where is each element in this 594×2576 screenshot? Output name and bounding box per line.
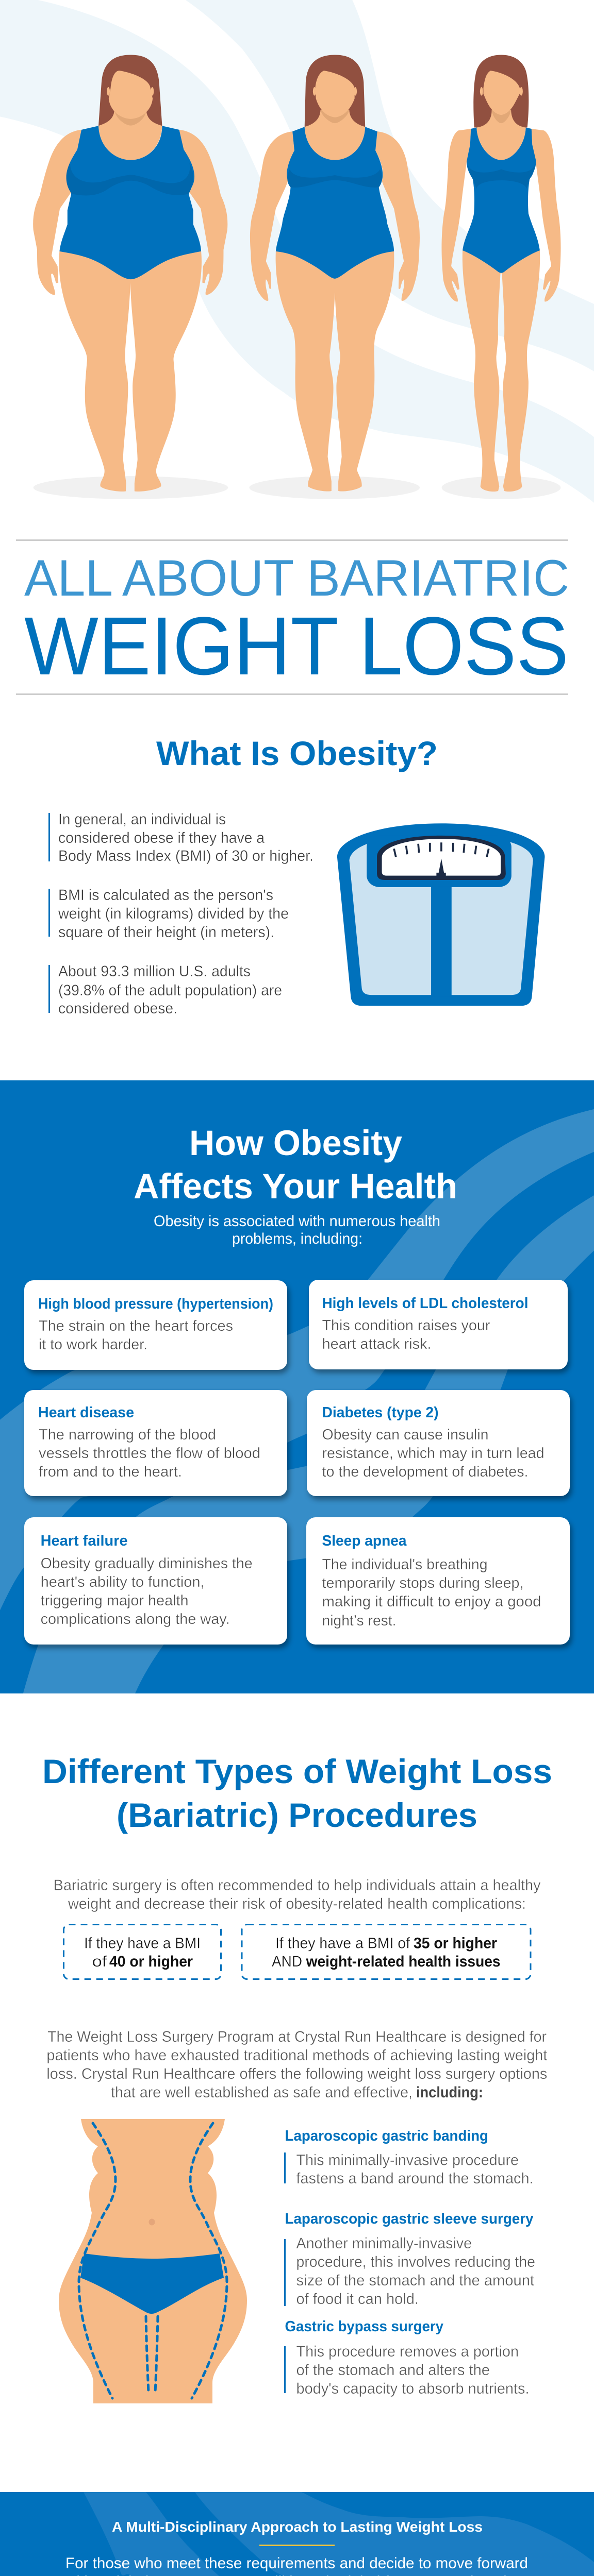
card: LDL cholesterol <box>309 1280 568 1369</box>
callout: BMI 40: of <box>92 1953 107 1970</box>
panel: multi-disciplinary approach <box>0 2492 594 2576</box>
panel: how obesity affects your health <box>0 1080 594 1695</box>
card: diabetes: Obesity can cause insulin <box>322 1427 489 1443</box>
card: sleep apnea: Sleep apnea <box>322 1533 407 1549</box>
text block: weight loss surgery program: including: <box>416 2084 483 2101</box>
procedure: gastric bypass: body's capacity to absorb nutrients. <box>296 2380 529 2397</box>
callout: BMI 40: If they have a BMI <box>84 1935 201 1952</box>
text block: obesity facts <box>48 811 314 1017</box>
text block: obesity facts: About 93.3 million U.S. adults <box>58 963 251 980</box>
procedure: gastric sleeve: Laparoscopic gastric sleeve surgery <box>285 2211 533 2227</box>
card: heart disease: Heart disease <box>38 1404 134 1421</box>
subtitle: problems, including: <box>232 1230 362 1247</box>
text block: obesity facts: (39.8% of the adult population) are <box>58 982 282 999</box>
text block: obesity facts: In general, an individual is <box>58 811 226 828</box>
figure: medium <box>249 55 420 499</box>
card: heart disease: vessels throttles the flow of blood <box>39 1445 260 1462</box>
callout: BMI 40 <box>64 1925 221 1979</box>
card: diabetes <box>307 1390 570 1496</box>
heading: how obesity: Affects Your Health <box>134 1166 457 1206</box>
card: heart failure: Obesity gradually diminishes the <box>41 1555 253 1572</box>
heading: how obesity <box>134 1123 457 1206</box>
text block: surgery intro <box>54 1877 541 1912</box>
card: high blood pressure: The strain on the heart forces <box>39 1318 233 1334</box>
procedure: gastric sleeve: size of the stomach and the amount <box>296 2272 535 2289</box>
procedure: gastric banding: This minimally-invasive procedure <box>296 2151 519 2169</box>
heading: types of procedures: (Bariatric) Procedures <box>117 1796 477 1834</box>
card: heart disease: The narrowing of the blood <box>39 1427 216 1443</box>
text block: surgery intro: Bariatric surgery is often recommended to help individuals attain a healthy <box>54 1877 541 1894</box>
text block: weight loss surgery program: The Weight Loss Surgery Program at Crystal Run Healthcare is designed for <box>47 2028 547 2045</box>
card: heart disease: from and to the heart. <box>39 1464 182 1480</box>
text block: obesity facts: Body Mass Index (BMI) of 30 or higher. <box>58 848 314 865</box>
illustration: torso with incision lines <box>59 2119 247 2403</box>
text block: obesity facts: considered obese. <box>58 1000 177 1017</box>
hero illustration: three figures <box>0 0 594 503</box>
procedure: gastric sleeve: of food it can hold. <box>296 2291 419 2308</box>
heading: how obesity: How Obesity <box>189 1123 402 1163</box>
text block: weight loss surgery program: loss. Crystal Run Healthcare offers the following weight loss surgery options <box>46 2065 547 2082</box>
text block: weight loss surgery program: patients who have exhausted traditional methods of achieving lasting weight <box>46 2047 548 2064</box>
callout: BMI 35 <box>242 1925 531 1979</box>
text block: obesity facts: BMI is calculated as the person's <box>58 887 273 904</box>
text block: surgery intro: weight and decrease their risk of obesity-related health complications: <box>68 1895 526 1912</box>
card: heart failure <box>24 1517 287 1645</box>
subtitle: Obesity is associated with numerous health <box>154 1213 440 1230</box>
card: sleep apnea <box>306 1517 570 1645</box>
title block <box>16 539 569 695</box>
heading: types of procedures: Different Types of Weight Loss <box>42 1752 552 1790</box>
card: heart failure: Heart failure <box>41 1533 128 1549</box>
card: high blood pressure: High blood pressure (hypertension) <box>38 1296 273 1312</box>
callout: BMI 35: 35 or higher <box>414 1935 497 1952</box>
card: sleep apnea: night’s rest. <box>322 1613 396 1629</box>
procedure: gastric sleeve <box>284 2211 535 2308</box>
heading: multi-disciplinary: A Multi-Disciplinary Approach to Lasting Weight Loss <box>112 2519 483 2535</box>
card: heart failure: complications along the way. <box>41 1611 230 1628</box>
card: LDL cholesterol: heart attack risk. <box>322 1336 431 1352</box>
procedure: gastric bypass <box>284 2318 529 2397</box>
card: LDL cholesterol: This condition raises your <box>322 1317 490 1334</box>
card: diabetes: resistance, which may in turn lead <box>322 1445 544 1462</box>
procedure: gastric sleeve: Another minimally-invasive <box>296 2235 472 2252</box>
text block: obesity facts: considered obese if they have a <box>58 829 265 846</box>
procedure: gastric bypass: This procedure removes a portion <box>296 2343 519 2360</box>
icon: bathroom scale <box>337 823 544 1006</box>
card: heart failure: heart's ability to function, <box>41 1574 205 1590</box>
text block: obesity facts: square of their height (in meters). <box>58 924 274 941</box>
callout: BMI 35: weight-related health issues <box>306 1953 501 1970</box>
procedure: gastric sleeve: procedure, this involves reducing the <box>296 2253 535 2270</box>
text block: obesity facts: weight (in kilograms) divided by the <box>58 905 289 922</box>
title block: WEIGHT LOSS <box>24 600 569 692</box>
figure: largest <box>33 55 228 499</box>
procedure: gastric banding: fastens a band around the stomach. <box>296 2170 533 2187</box>
procedure: gastric bypass: Gastric bypass surgery <box>285 2318 443 2335</box>
card: diabetes: to the development of diabetes. <box>322 1464 528 1480</box>
callout: BMI 35: AND <box>272 1953 302 1970</box>
text block: weight loss surgery program <box>46 2028 548 2101</box>
card: sleep apnea: temporarily stops during sleep, <box>322 1575 524 1591</box>
title block: ALL ABOUT BARIATRIC <box>24 549 569 606</box>
heading: types of procedures <box>42 1752 552 1834</box>
card: diabetes: Diabetes (type 2) <box>322 1404 438 1421</box>
card: high blood pressure <box>24 1280 287 1370</box>
figure: slim <box>441 55 561 499</box>
text block: weight loss surgery program: that are well established as safe and effective, <box>111 2084 412 2101</box>
card: high blood pressure: it to work harder. <box>39 1336 147 1353</box>
callout: BMI 40: 40 or higher <box>109 1953 193 1970</box>
text block: program details: For those who meet these requirements and decide to move forward <box>65 2555 528 2572</box>
card: heart failure: triggering major health <box>41 1592 189 1609</box>
card: heart disease <box>24 1390 287 1496</box>
card: sleep apnea: making it difficult to enjoy a good <box>322 1594 541 1610</box>
procedure: gastric banding: Laparoscopic gastric banding <box>285 2128 488 2144</box>
divider: gold line <box>259 2545 335 2546</box>
procedure: gastric banding <box>284 2128 533 2187</box>
subtitle <box>154 1213 440 1247</box>
card: sleep apnea: The individual's breathing <box>322 1556 488 1573</box>
procedure: gastric bypass: of the stomach and alters the <box>296 2362 490 2379</box>
heading: what is obesity: What Is Obesity? <box>156 734 438 772</box>
card: LDL cholesterol: High levels of LDL cholesterol <box>322 1295 528 1312</box>
callout: BMI 35: If they have a BMI of <box>275 1935 410 1952</box>
